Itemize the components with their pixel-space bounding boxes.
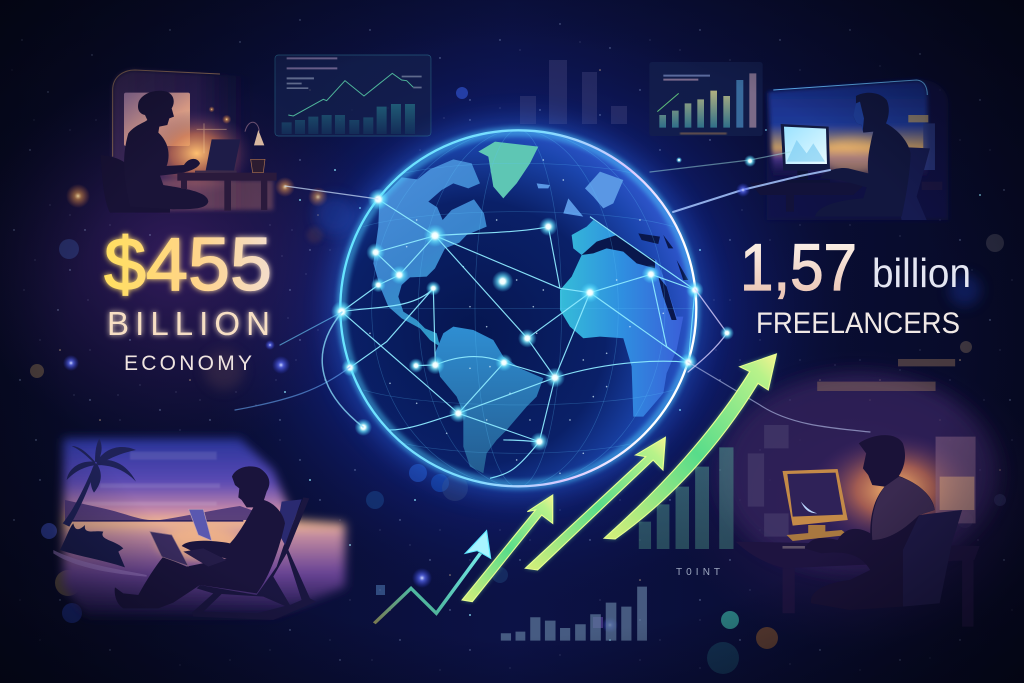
foliage (60, 523, 125, 567)
connection lines from globe to scenes (235, 152, 870, 432)
monitor (782, 469, 848, 541)
globe (331, 130, 704, 487)
window glow (124, 93, 273, 210)
small chart label: T 0 I N T (676, 567, 720, 578)
panel: man at a monitor (750, 79, 948, 220)
reclining person (115, 466, 285, 608)
man silhouette (815, 93, 911, 217)
deck chair (192, 497, 316, 620)
desk (736, 542, 980, 627)
palm tree (63, 438, 136, 527)
globe rim (342, 132, 695, 485)
arrow 2 (462, 495, 553, 602)
stat unit: BILLION (107, 305, 270, 342)
laptops (150, 532, 188, 566)
chair (101, 155, 170, 213)
monitor (781, 124, 830, 183)
man silhouette (805, 435, 935, 610)
chair (899, 510, 962, 607)
connection nodes (331, 189, 704, 451)
panel: beach freelancer (53, 438, 345, 620)
stat: $455 billion economy (104, 222, 272, 375)
panel: woman at a laptop (101, 70, 277, 213)
inland dark seas (582, 233, 688, 320)
stat value: $455 (104, 222, 272, 306)
faded bar chart, top centre (520, 60, 627, 124)
network links (342, 199, 695, 478)
desk (177, 173, 277, 211)
dashboard panel: line and bar chart (275, 55, 431, 136)
africa and europe (560, 220, 683, 417)
panel: man at desk with warm light (639, 359, 997, 627)
faded bars behind arrows (639, 447, 734, 549)
tiny map lights (370, 160, 663, 473)
dashboard panel: rising bars (649, 62, 763, 136)
desk (750, 183, 867, 212)
stat unit: billion (872, 250, 971, 296)
stat value: 1,57 (740, 230, 857, 304)
woman silhouette (124, 91, 208, 209)
greenland (478, 142, 538, 198)
chair (897, 147, 930, 220)
north america (373, 159, 487, 347)
hills (65, 500, 280, 520)
arrow 4 (604, 354, 776, 539)
stat caption: ECONOMY (124, 352, 252, 375)
south america (435, 327, 543, 473)
bottom bar chart (501, 587, 647, 641)
lamp and mug (245, 122, 265, 173)
meridians and parallels (340, 130, 697, 487)
arrow glow (462, 354, 776, 602)
arrow 1: cyan zigzag (374, 531, 491, 623)
growth arrows (374, 354, 776, 623)
stat: 1,57 billion freelancers (740, 230, 971, 340)
stat caption: FREELANCERS (756, 307, 960, 340)
globe halo (332, 122, 704, 494)
arrow 3 (525, 437, 665, 570)
laptop (206, 139, 240, 171)
